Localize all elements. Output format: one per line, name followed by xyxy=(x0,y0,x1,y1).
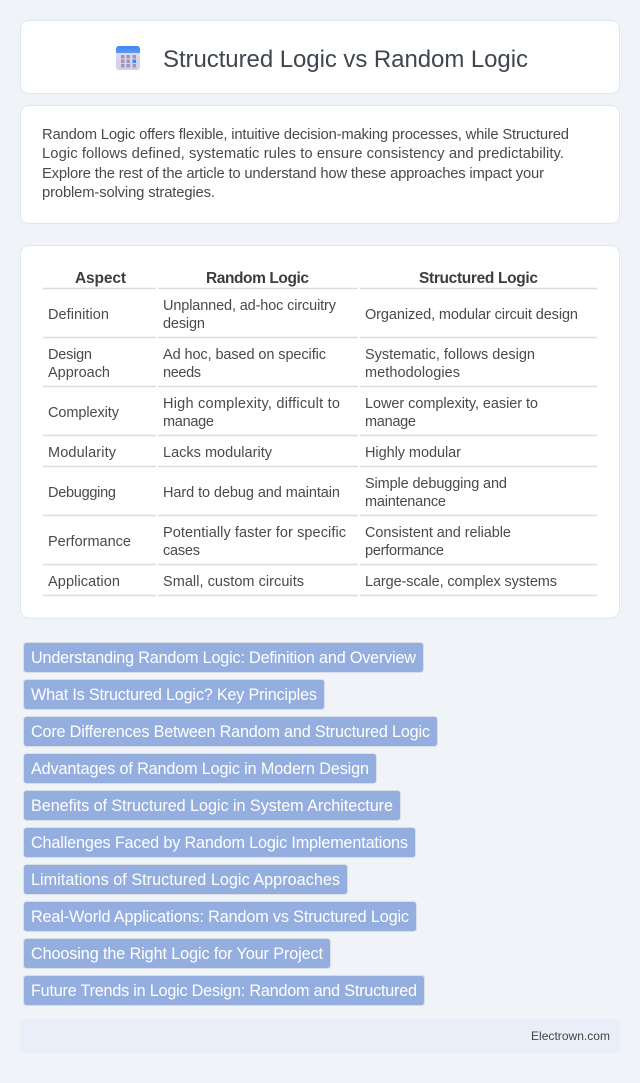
row: design approach: Approach xyxy=(48,365,110,381)
row: application: Large-scale, complex systems xyxy=(365,574,557,590)
topic chip 10 xyxy=(24,976,424,1006)
row: modularity: Highly modular xyxy=(365,445,461,461)
topic chip 3: Core Differences Between Random and Structured Logic xyxy=(31,723,430,741)
topic chip 5 xyxy=(24,790,400,820)
row: definition: design xyxy=(163,316,205,332)
intro text: problem-solving strategies. xyxy=(42,185,215,201)
topic chip 6: Challenges Faced by Random Logic Implementations xyxy=(31,834,408,852)
table header: Structured Logic xyxy=(419,270,538,287)
panel: title header xyxy=(20,20,620,94)
row: complexity: Complexity xyxy=(48,405,120,421)
panel: topic links xyxy=(24,642,438,1006)
row: debugging: Simple debugging and xyxy=(365,476,507,492)
row: complexity: Lower complexity, easier to xyxy=(365,396,538,412)
row: performance: cases xyxy=(163,543,200,559)
topic chip 2 xyxy=(24,680,324,710)
row: design approach: Systematic, follows design xyxy=(365,347,535,363)
topic chip 8 xyxy=(24,902,416,932)
topic chip 5: Benefits of Structured Logic in System Architecture xyxy=(31,797,393,815)
topic chip 10: Future Trends in Logic Design: Random and Structured xyxy=(31,982,417,1000)
row: design approach: Design xyxy=(48,347,92,363)
row: definition: Unplanned, ad-hoc circuitry xyxy=(163,298,337,314)
intro text xyxy=(42,127,569,201)
row: design approach: needs xyxy=(163,365,201,381)
topic chip 6 xyxy=(24,828,416,858)
row: modularity: Lacks modularity xyxy=(163,445,273,461)
footer: Electrown.com xyxy=(531,1029,610,1043)
row: application: Application xyxy=(48,574,120,590)
row: design approach xyxy=(48,347,535,381)
row: debugging: Debugging xyxy=(48,485,116,501)
intro text: Logic follows defined, systematic rules to ensure consistency and predictability. xyxy=(42,146,564,162)
icon: calendar grid xyxy=(116,46,140,70)
row: performance xyxy=(48,525,511,559)
footer xyxy=(20,1019,620,1053)
topic chip 9 xyxy=(24,938,330,968)
table header xyxy=(75,270,538,287)
intro text: Explore the rest of the article to understand how these approaches impact your xyxy=(42,166,544,182)
title: Structured Logic vs Random Logic xyxy=(163,46,528,73)
topic chip 1 xyxy=(24,642,424,672)
row: definition: Definition xyxy=(48,307,109,323)
row: performance: performance xyxy=(365,543,444,559)
row: design approach: methodologies xyxy=(365,365,460,381)
row: complexity: manage xyxy=(163,414,214,430)
row: performance: Consistent and reliable xyxy=(365,525,511,541)
intro text: Random Logic offers flexible, intuitive decision-making processes, while Structured xyxy=(42,127,569,143)
row: definition: Organized, modular circuit design xyxy=(365,307,578,323)
row: complexity xyxy=(48,396,538,430)
row: debugging: Hard to debug and maintain xyxy=(163,485,340,501)
topic chip 3 xyxy=(24,716,438,746)
topic chip 2: What Is Structured Logic? Key Principles xyxy=(31,686,317,704)
table header: Aspect xyxy=(75,270,126,287)
row: complexity: High complexity, difficult to xyxy=(163,396,340,412)
topic chip 9: Choosing the Right Logic for Your Project xyxy=(31,945,324,963)
topic chip 7 xyxy=(24,864,348,894)
topic chip 8: Real-World Applications: Random vs Structured Logic xyxy=(31,908,409,926)
topic chip 1: Understanding Random Logic: Definition and Overview xyxy=(31,649,416,667)
topic chip 4: Advantages of Random Logic in Modern Design xyxy=(31,760,369,778)
row: design approach: Ad hoc, based on specific xyxy=(163,347,326,363)
panel: introduction xyxy=(20,106,620,224)
row: debugging xyxy=(48,476,507,510)
row: application: Small, custom circuits xyxy=(163,574,304,590)
topic chip 7: Limitations of Structured Logic Approaches xyxy=(31,871,340,889)
row: definition xyxy=(48,298,578,332)
row: performance: Performance xyxy=(48,534,131,550)
topic chip 4 xyxy=(24,754,376,784)
row: complexity: manage xyxy=(365,414,416,430)
panel: comparison table xyxy=(20,246,620,618)
row: performance: Potentially faster for specific xyxy=(163,525,346,541)
row: modularity xyxy=(48,445,461,461)
table header: Random Logic xyxy=(206,270,309,287)
row: debugging: maintenance xyxy=(365,494,446,510)
row: application xyxy=(48,574,557,590)
row: modularity: Modularity xyxy=(48,445,117,461)
